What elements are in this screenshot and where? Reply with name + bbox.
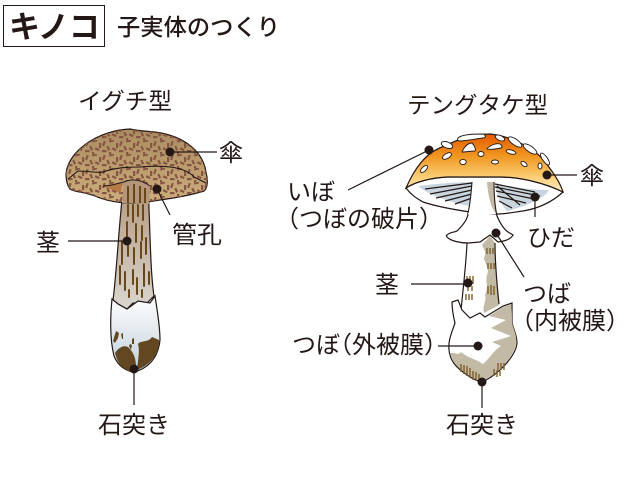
label: amanita stem — [375, 272, 472, 299]
title: キノコ — [9, 10, 100, 45]
label: bolete cap — [166, 140, 243, 167]
label: gills — [527, 192, 575, 252]
heading: amanita type: テングタケ型 — [407, 92, 548, 118]
volva — [449, 300, 517, 382]
label: bolete base — [98, 364, 170, 439]
label: amanita stem: 茎 — [375, 272, 399, 299]
label: ring: （内被膜） — [510, 308, 630, 335]
gills underside — [406, 177, 563, 216]
label: bolete stem: 茎 — [36, 230, 60, 257]
heading: bolete type: イグチ型 — [78, 88, 172, 114]
lower stem — [461, 236, 499, 313]
label: warts — [275, 146, 443, 233]
subtitle: 子実体のつくり — [117, 14, 280, 40]
label: bolete stem — [36, 230, 132, 257]
label: amanita base — [446, 378, 518, 439]
label: amanita base: 石突き — [446, 412, 518, 439]
volva base — [111, 296, 160, 372]
cap — [66, 129, 207, 204]
label: bolete cap: 傘 — [219, 140, 243, 167]
label: tube pores: 管孔 — [172, 222, 222, 249]
illustration: bolete mushroom — [66, 129, 207, 372]
label: gills: ひだ — [527, 225, 575, 252]
label: amanita cap: 傘 — [580, 163, 604, 190]
label: ring: つば — [523, 281, 571, 308]
label: bolete base: 石突き — [98, 412, 170, 439]
illustration: amanita mushroom — [406, 134, 563, 382]
label: warts: いぼ — [287, 179, 335, 206]
label: volva: つぼ（外被膜） — [292, 332, 448, 359]
stem — [113, 181, 154, 309]
label: warts: （つぼの破片） — [275, 206, 443, 233]
cap with warts — [406, 134, 563, 192]
label: amanita cap — [542, 163, 604, 190]
label: tube pores — [152, 184, 222, 249]
upper stem and ring — [446, 182, 513, 243]
label: ring — [492, 228, 630, 335]
